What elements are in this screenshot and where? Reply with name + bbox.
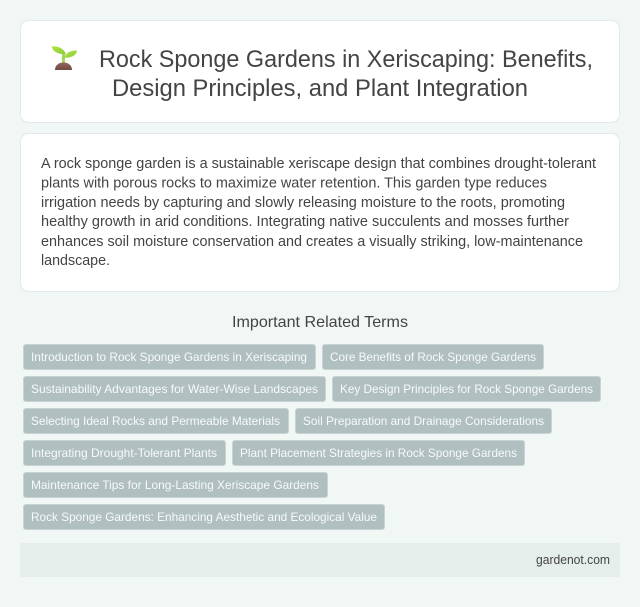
tag: maintenance	[24, 472, 328, 498]
tag: core benefits: Core Benefits of Rock Sponge Gardens	[330, 350, 536, 364]
tag: core benefits	[322, 344, 544, 370]
heading: important related terms: Important Related Terms	[232, 314, 408, 331]
text block: description: plants with porous rocks to maximize water retention. This garden type reduces	[41, 176, 547, 192]
tag: drought-tolerant plants	[24, 440, 226, 466]
tag: sustainability: Sustainability Advantages for Water-Wise Landscapes	[31, 382, 318, 396]
title: Design Principles, and Plant Integration	[112, 75, 528, 102]
text block: description: healthy growth in arid conditions. Integrating native succulents and mosses further	[41, 214, 569, 230]
panel: description	[20, 134, 620, 292]
tag: soil preparation: Soil Preparation and Drainage Considerations	[303, 414, 544, 428]
text block: description: enhances soil moisture conservation and creates a visually striking, low-maintenance	[41, 234, 583, 250]
tag: plant placement	[232, 440, 524, 466]
text block: description	[41, 156, 596, 269]
tag: plant placement: Plant Placement Strategies in Rock Sponge Gardens	[240, 446, 517, 460]
title: Rock Sponge Gardens in Xeriscaping: Benefits,	[99, 46, 593, 73]
tag: aesthetic and ecological value	[24, 504, 384, 530]
tag: sustainability	[24, 376, 326, 402]
tag: selecting rocks	[24, 408, 288, 434]
tag: introduction: Introduction to Rock Sponge Gardens in Xeriscaping	[31, 350, 307, 364]
tag: drought-tolerant plants: Integrating Drought-Tolerant Plants	[31, 446, 217, 460]
tag: soil preparation	[296, 408, 552, 434]
tag: design principles: Key Design Principles for Rock Sponge Gardens	[340, 382, 593, 396]
tag: maintenance: Maintenance Tips for Long-Lasting Xeriscape Gardens	[31, 478, 319, 492]
title	[99, 46, 593, 102]
footer	[20, 543, 620, 577]
icon: sprout	[52, 46, 77, 70]
text block: description: irrigation needs by capturing and slowly releasing moisture to the roots, promoting	[41, 195, 565, 211]
text block: description: landscape.	[41, 253, 110, 269]
panel: title card	[20, 20, 620, 122]
tag list	[24, 344, 600, 530]
tag: introduction	[24, 344, 316, 370]
text block: description: A rock sponge garden is a sustainable xeriscape design that combines drought-tolerant	[41, 156, 596, 172]
tag: design principles	[332, 376, 600, 402]
footer: gardenot.com	[536, 552, 610, 567]
tag: aesthetic and ecological value: Rock Sponge Gardens: Enhancing Aesthetic and Ecological Value	[31, 510, 377, 524]
tag: selecting rocks: Selecting Ideal Rocks and Permeable Materials	[31, 414, 280, 428]
